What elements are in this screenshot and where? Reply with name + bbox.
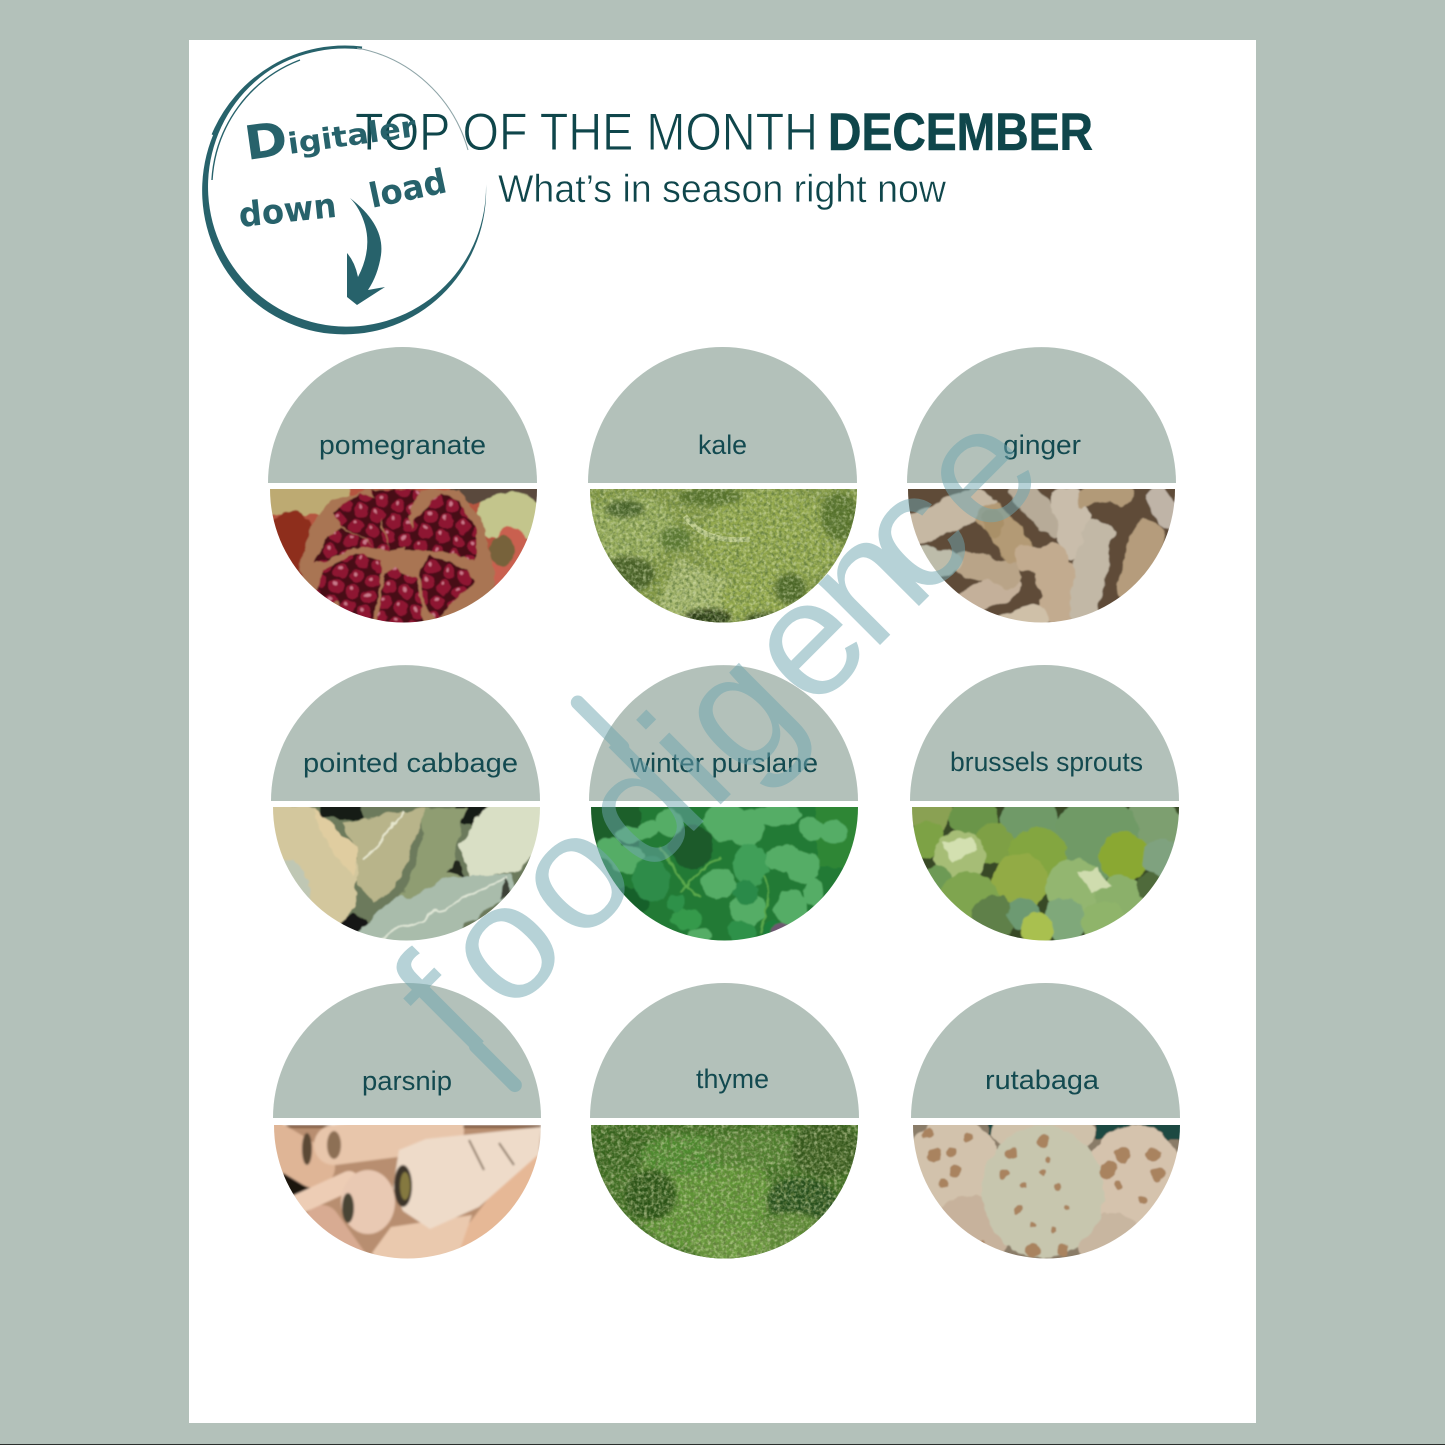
label cap: pomegranate <box>268 347 537 483</box>
stamp text: Digitaler: Digitaler <box>241 93 420 172</box>
label cap: thyme <box>590 983 859 1118</box>
panel: pointed cabbage <box>271 665 540 940</box>
title: DECEMBER <box>828 103 1093 162</box>
label cap: parsnip <box>273 983 541 1118</box>
panel: brussels sprouts <box>902 665 1189 951</box>
panel: ginger <box>898 347 1185 633</box>
label cap: brussels sprouts: brussels sprouts <box>950 747 1143 777</box>
icon: curved arrow <box>347 198 385 305</box>
panel: parsnip <box>273 983 541 1276</box>
label cap: winter purslane: winter purslane <box>629 748 818 778</box>
subtitle: What’s in season right now <box>498 168 947 211</box>
photo: thyme <box>586 1122 861 1263</box>
label cap: brussels sprouts <box>910 665 1179 801</box>
label cap: winter purslane <box>589 665 858 801</box>
label cap: ginger <box>907 347 1176 483</box>
photo: parsnip <box>274 1125 541 1258</box>
photo: rutabaga <box>913 1125 1180 1258</box>
label cap: rutabaga: rutabaga <box>985 1065 1100 1095</box>
panel: pomegranate <box>268 347 537 622</box>
label cap: pomegranate: pomegranate <box>319 430 486 460</box>
stamp text: down: down <box>237 186 338 236</box>
panel: kale <box>585 347 860 627</box>
white page <box>189 40 1256 1423</box>
stamp text: load: load <box>366 161 450 217</box>
photo: brussels sprouts <box>912 807 1179 940</box>
photo: kale <box>585 488 860 627</box>
panel: winter purslane <box>581 665 868 951</box>
photo: pointed cabbage <box>273 807 540 940</box>
title: TOP OF THE MONTH <box>355 103 818 162</box>
label cap: pointed cabbage <box>271 665 540 801</box>
label cap: parsnip: parsnip <box>362 1066 452 1096</box>
brush circle <box>202 46 486 334</box>
label cap: kale <box>588 347 857 483</box>
label cap: pointed cabbage: pointed cabbage <box>303 748 518 778</box>
stamp: digital download <box>202 46 486 334</box>
photo: ginger <box>908 489 1175 622</box>
watermark: foodigence: foodigence <box>358 371 1073 1087</box>
label cap: rutabaga <box>911 983 1180 1118</box>
panel: thyme <box>586 983 861 1263</box>
label cap: thyme: thyme <box>696 1064 769 1094</box>
photo: pomegranate <box>270 489 537 622</box>
label cap: ginger: ginger <box>1003 430 1081 460</box>
label cap: kale: kale <box>698 430 747 460</box>
photo: winter purslane <box>591 807 858 940</box>
panel: rutabaga <box>903 983 1190 1269</box>
